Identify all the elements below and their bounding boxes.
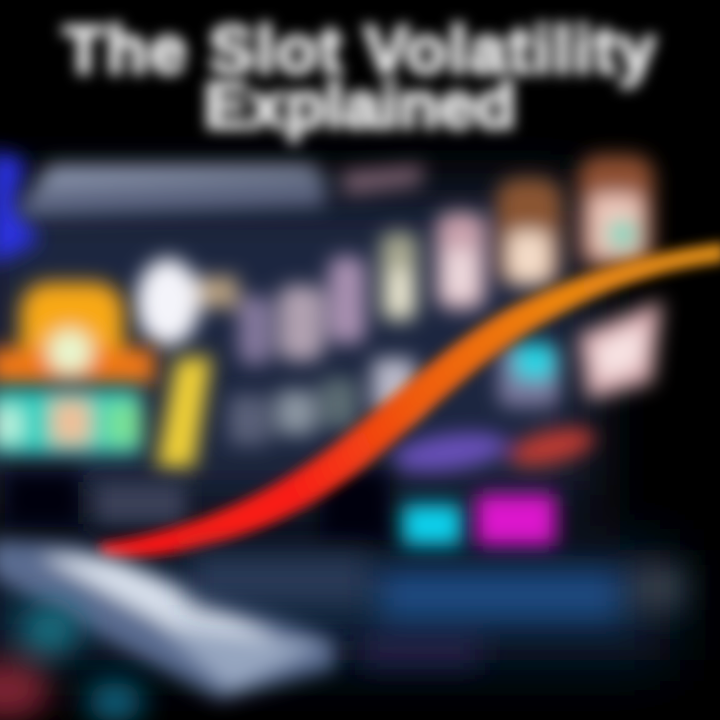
left slot machine [0,282,212,468]
volatility curve [98,242,720,558]
bottom left accents [0,606,143,720]
bottom deck sweep [0,540,335,700]
machine reel band [0,390,143,454]
machine top glow [0,282,155,384]
blue star icon [0,150,40,265]
title [52,12,666,153]
title: Explained [204,68,516,142]
cyan button [402,504,462,546]
yellow bar [156,356,212,468]
header text lines [20,165,425,216]
bottom right deck bars [190,555,685,665]
dark base panels [5,470,390,540]
title: The Slot Volatility [63,12,657,88]
background glow [0,190,670,660]
magenta button [476,494,556,546]
lower row of reels [228,300,662,478]
slot reels rising row [136,155,654,365]
